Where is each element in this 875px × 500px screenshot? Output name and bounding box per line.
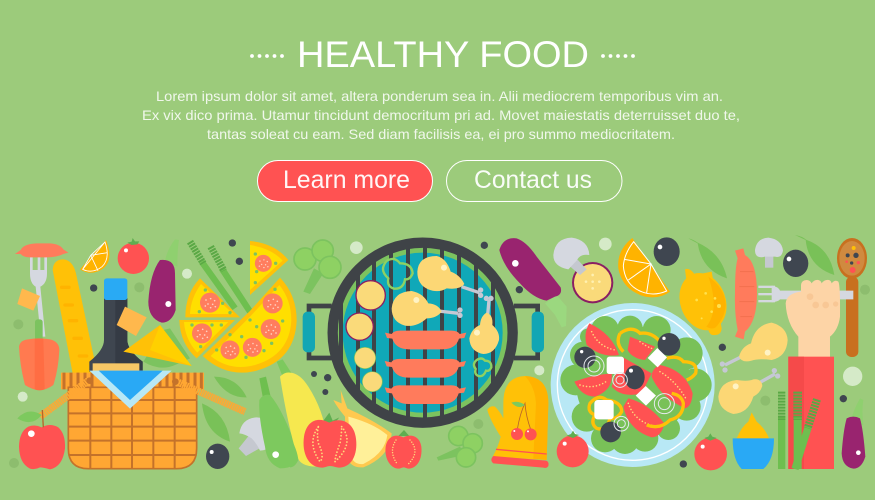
icon: zucchini remainder bbox=[290, 437, 298, 467]
icon: chicken leg lower bbox=[718, 368, 780, 414]
icon: broccoli top-left bbox=[294, 240, 341, 294]
icon: asparagus stalks bbox=[782, 392, 817, 469]
icon: olive top bbox=[654, 237, 680, 266]
icon: fork with sausage bbox=[15, 243, 68, 337]
icon: large pizza bbox=[203, 278, 297, 373]
soft dots bbox=[9, 269, 192, 468]
button: learn more: Learn more bbox=[283, 166, 410, 194]
tomato pieces bbox=[574, 323, 693, 437]
icon: pepper rings bbox=[383, 259, 491, 376]
icon: bottle bbox=[89, 278, 143, 372]
button: learn more bbox=[258, 160, 432, 202]
feta cubes bbox=[594, 348, 667, 419]
icon: cheese cube on bottle bbox=[117, 307, 147, 336]
lettuce bbox=[560, 316, 712, 454]
icon: pizza slice top bbox=[250, 241, 288, 295]
icon: salad plate bbox=[551, 303, 715, 467]
icon: chicken leg upper bbox=[720, 323, 788, 373]
icon: baguette bbox=[53, 259, 97, 373]
icon: asparagus bbox=[190, 242, 250, 312]
icon: grill bbox=[303, 230, 544, 437]
icon: squash stem bbox=[277, 359, 292, 378]
icon: hand and sleeve bbox=[786, 280, 840, 469]
icon: olive right bbox=[783, 250, 808, 277]
icon: leaves bbox=[202, 377, 247, 442]
icon: apple bbox=[17, 410, 65, 469]
left food group bbox=[9, 238, 298, 469]
heading: HEALTHY FOOD bbox=[297, 34, 589, 75]
icon: broccoli bottom bbox=[437, 426, 482, 467]
plate bbox=[551, 303, 715, 467]
icon: mushroom top bbox=[553, 238, 589, 275]
icon: eggplant slices bbox=[346, 281, 385, 392]
soft dots and olives bbox=[599, 238, 870, 468]
icon: pizza slice lower-left bbox=[179, 320, 235, 358]
icon: lemon bbox=[672, 266, 734, 337]
grill group bbox=[280, 230, 567, 469]
button: contact us bbox=[446, 160, 622, 202]
icon: tomato half large bbox=[304, 413, 356, 468]
icon: orange wedge bbox=[618, 238, 670, 297]
icon: onion bbox=[333, 390, 392, 467]
icon: olive bbox=[206, 444, 229, 469]
icon: sausage vertical bbox=[735, 248, 757, 339]
icon: diagonal eggplant bbox=[499, 238, 567, 327]
icon: zucchini bbox=[259, 377, 298, 468]
icon: bell pepper bbox=[19, 319, 59, 390]
icon: orange slice bbox=[80, 240, 109, 273]
lettuce behind cheese bbox=[143, 328, 190, 368]
grill rim bbox=[333, 243, 513, 423]
icon: wooden spoon bbox=[837, 238, 867, 357]
yellow pepper rings bbox=[589, 329, 696, 429]
icon: chicken legs bbox=[392, 256, 499, 354]
icon: oven mitt bbox=[487, 376, 549, 468]
right dots bbox=[601, 54, 635, 58]
right food group bbox=[551, 235, 870, 470]
icon: bowl bbox=[733, 412, 774, 469]
button: contact us: Contact us bbox=[474, 166, 592, 194]
icon: tomatoes bbox=[557, 431, 727, 470]
tomato seeds bbox=[580, 332, 687, 427]
small olives bbox=[90, 239, 243, 292]
intro text block: tantas soleat cu eam. Sed diam facilisis ea, ei pro summo mediocritatem. bbox=[207, 126, 675, 142]
intro text block: Lorem ipsum dolor sit amet, altera ponderum sea in. Alii mediocrem temporibus vim an. bbox=[156, 88, 723, 104]
icon: picnic basket bbox=[40, 371, 245, 469]
olives bbox=[574, 333, 680, 442]
icon: eggplant bottom right bbox=[842, 398, 865, 469]
grill bars bbox=[339, 248, 495, 418]
icon: tomato bbox=[118, 238, 149, 274]
icon: cheese cube bbox=[17, 288, 40, 311]
icon: yellow squash bbox=[280, 372, 327, 467]
icon: pizza slice upper-left bbox=[185, 278, 240, 317]
icon: leaf right bbox=[795, 235, 834, 275]
left dots bbox=[250, 54, 284, 58]
soft dots and olives bbox=[311, 241, 544, 429]
title bbox=[250, 34, 635, 75]
onion rings bbox=[584, 356, 674, 431]
intro text block: Ex vix dico prima. Utamur tincidunt democritum pri ad. Movet maiestatis deterruisset duo te, bbox=[142, 107, 740, 123]
icon: eggplant bbox=[148, 239, 179, 323]
icon: fork in hand bbox=[758, 286, 853, 302]
icon: sausages bbox=[385, 331, 466, 404]
icon: cheese wedge bbox=[123, 325, 192, 366]
icon: tomato half small bbox=[385, 430, 422, 469]
grill surface bbox=[338, 248, 508, 418]
icon: leaf bbox=[688, 238, 727, 278]
icon: mushroom right bbox=[755, 238, 783, 268]
grill handles bbox=[303, 306, 544, 358]
intro text block bbox=[142, 88, 740, 142]
icon: mushroom bbox=[239, 417, 275, 456]
icon: eggplant slice bbox=[572, 262, 613, 303]
